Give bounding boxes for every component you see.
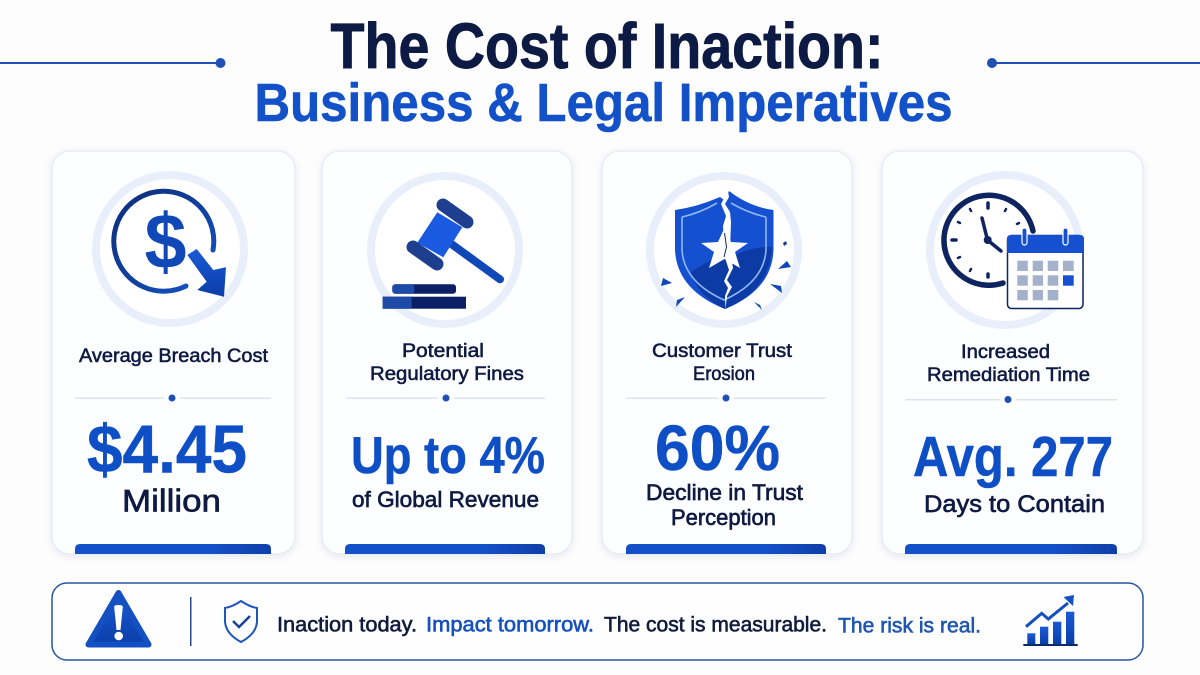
divider <box>75 390 271 406</box>
label: Increased <box>961 342 1050 363</box>
label line two: Erosion <box>693 364 755 385</box>
unit: of Global Revenue <box>352 487 539 512</box>
icon: cracked shield <box>661 191 791 310</box>
title: The Cost of Inaction: <box>330 10 884 82</box>
message: impact tomorrow: Impact tomorrow. <box>426 614 594 636</box>
divider <box>190 597 192 646</box>
label line two: Remediation Time <box>927 365 1090 386</box>
message: inaction today: Inaction today. <box>277 614 417 636</box>
accent bar <box>626 544 826 554</box>
label: Customer Trust <box>652 341 793 362</box>
value: $4.45 <box>87 412 247 488</box>
left header rule <box>0 58 226 68</box>
panel: customer trust <box>602 151 852 554</box>
accent bar <box>905 544 1117 554</box>
panel: average breach cost <box>52 151 295 554</box>
icon: dollar with falling arrow <box>114 191 226 297</box>
accent bar <box>345 544 545 554</box>
icon: clock and calendar <box>944 195 1084 308</box>
message: the cost is measurable: The cost is measurable. <box>604 614 827 636</box>
icon: gavel <box>383 205 500 309</box>
callout strip <box>52 583 1143 660</box>
value: 60% <box>655 412 780 484</box>
value: Avg. 277 <box>913 425 1113 489</box>
divider <box>905 392 1117 408</box>
divider <box>626 390 826 406</box>
icon: rising bar chart <box>1023 595 1078 646</box>
unit: Days to Contain <box>924 491 1105 518</box>
unit line two: Perception <box>671 505 776 530</box>
divider <box>346 390 545 406</box>
icon: shield check <box>225 601 257 642</box>
label line two: Regulatory Fines <box>370 364 524 385</box>
title: Business & Legal Imperatives <box>254 73 952 133</box>
value: Up to 4% <box>351 427 545 485</box>
icon: warning triangle <box>88 593 148 644</box>
icon: dollar with falling arrow: $ <box>144 197 186 285</box>
right header rule <box>987 58 1200 68</box>
label: Potential <box>402 341 484 362</box>
panel: regulatory fines <box>322 151 572 554</box>
title <box>254 10 952 133</box>
message: the risk is real: The risk is real. <box>838 614 981 638</box>
panel: remediation time <box>882 151 1143 554</box>
unit: Decline in Trust <box>646 480 803 505</box>
accent bar <box>75 544 271 554</box>
unit: Million <box>122 482 221 518</box>
label: Average Breach Cost <box>79 346 269 367</box>
